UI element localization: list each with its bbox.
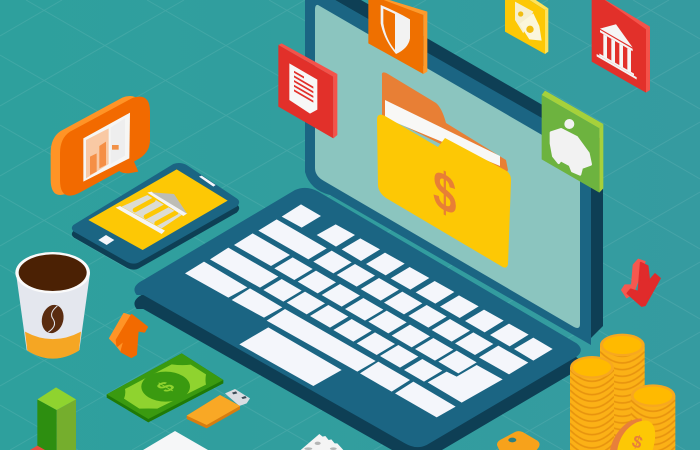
dollar sign: $ [433,156,456,229]
coffee cup [15,252,90,359]
tablet chart [83,113,130,182]
coin stacks [570,334,675,450]
receipt [301,434,343,450]
bank icon [116,192,187,234]
icon: bank red tile [592,0,650,93]
keyboard [185,204,553,417]
banknote [107,353,223,422]
dollar sign: $ [152,379,181,395]
coffee bean [39,303,66,335]
green bar chart [30,387,76,450]
folder [377,72,511,268]
smartphone [72,163,239,270]
icon: document red tile [278,43,337,138]
icon: money card [505,0,548,54]
arrow up orange [110,314,147,357]
laptop base [134,188,581,450]
usb stick [187,389,250,428]
laptop [134,0,603,450]
orange tag [497,431,540,450]
paper sheet [143,431,208,450]
icon: shield [368,0,427,74]
icon: piggy bank green tile [542,91,603,193]
arrow down red [622,259,660,306]
laptop screen [305,0,603,345]
speech bubble [51,96,150,196]
